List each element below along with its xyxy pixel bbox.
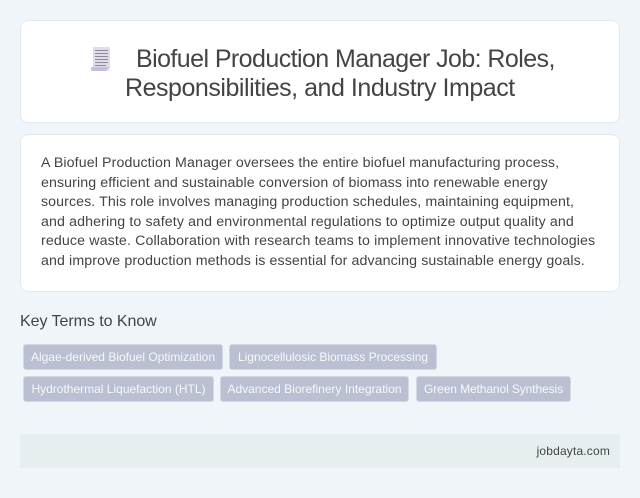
tag group: key terms	[23, 344, 571, 402]
description text: A Biofuel Production Manager oversees the entire biofuel manufacturing process,	[41, 155, 559, 171]
title: Biofuel Production Manager Job: Roles,	[136, 45, 555, 73]
heading: key terms: Key Terms to Know	[20, 313, 157, 330]
icon: document scroll	[91, 47, 110, 71]
panel: description card	[20, 134, 620, 292]
tag: algae: Algae-derived Biofuel Optimization	[31, 350, 215, 364]
description text: ensuring efficient and sustainable conversion of biomass into renewable energy	[41, 174, 548, 190]
tag: lignocellulosic	[229, 344, 437, 370]
tag: biorefinery	[220, 376, 409, 402]
panel: title card	[20, 20, 620, 123]
description text	[41, 155, 595, 268]
tag: methanol: Green Methanol Synthesis	[424, 382, 563, 396]
description text: and improve production methods is essential for advancing sustainable energy goals.	[41, 252, 585, 268]
tag: algae	[23, 344, 223, 370]
tag: methanol	[416, 376, 571, 402]
description text: reduce waste. Collaboration with research teams to implement innovative technologies	[41, 233, 595, 249]
tag: lignocellulosic: Lignocellulosic Biomass Processing	[238, 350, 428, 364]
tag: HTL: Hydrothermal Liquefaction (HTL)	[31, 382, 206, 396]
title: Responsibilities, and Industry Impact	[125, 74, 515, 102]
title	[125, 45, 555, 102]
tag: HTL	[23, 376, 214, 402]
footer bar	[20, 434, 620, 468]
description text: and adhering to safety and environmental regulations to optimize output quality and	[41, 214, 574, 230]
description text: sources. This role involves managing production schedules, maintaining equipment,	[41, 194, 574, 210]
tag: biorefinery: Advanced Biorefinery Integration	[227, 382, 402, 396]
footer source text: jobdayta.com	[537, 444, 610, 458]
